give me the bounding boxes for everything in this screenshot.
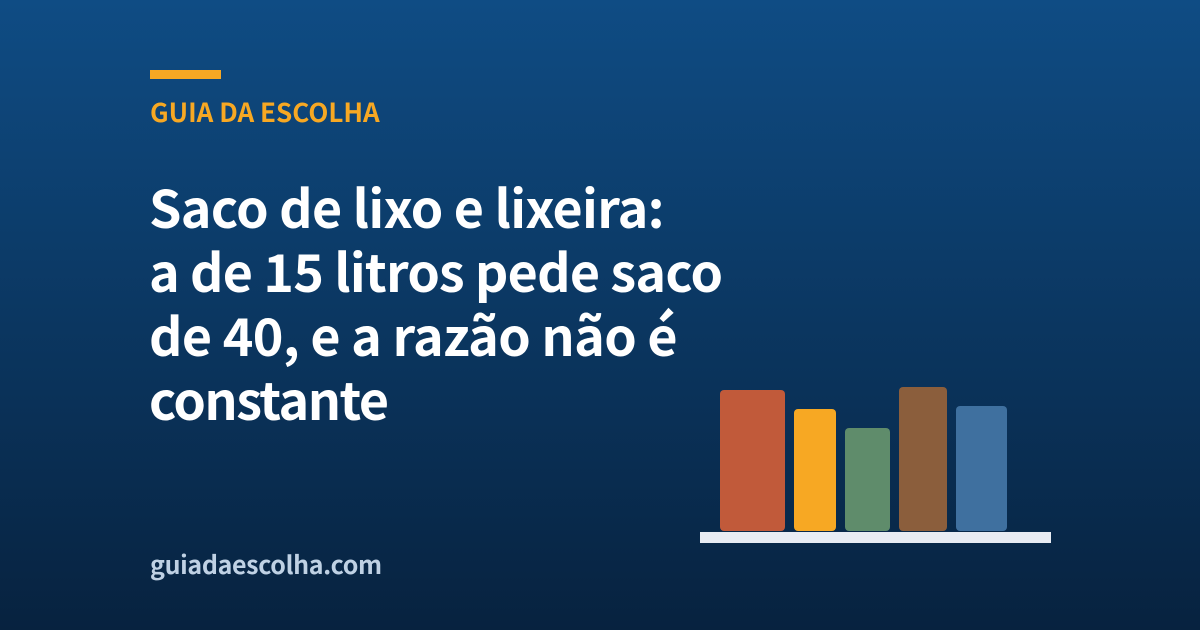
book: brown xyxy=(899,387,947,531)
eyebrow label: GUIA DA ESCOLHA xyxy=(150,93,380,130)
site url: guiadaescolha.com xyxy=(150,546,382,582)
illustration: books on shelf xyxy=(700,387,1051,543)
book: yellow xyxy=(794,409,836,531)
title xyxy=(149,168,722,435)
shelf xyxy=(700,532,1051,543)
book: blue xyxy=(956,406,1007,531)
title: constante xyxy=(149,360,388,435)
book: green xyxy=(845,428,890,531)
title: de 40, e a razão não é xyxy=(149,296,677,371)
title: a de 15 litros pede saco xyxy=(149,232,722,307)
accent bar xyxy=(150,70,221,79)
title: Saco de lixo e lixeira: xyxy=(149,168,664,243)
book: red xyxy=(720,390,785,531)
